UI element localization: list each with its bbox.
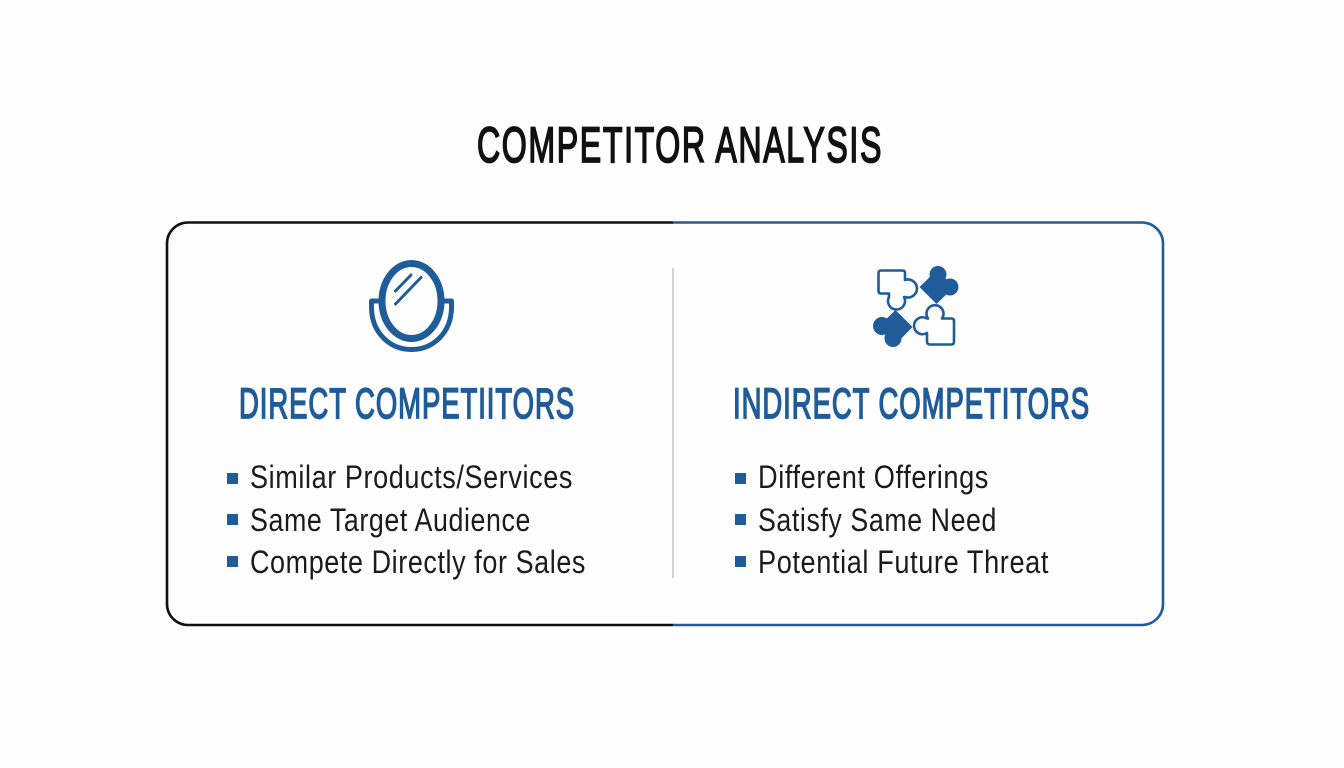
panel: indirect competitors [733, 266, 1090, 580]
list: direct competitor traits: Compete Directly for Sales [250, 544, 586, 580]
title: COMPETITOR ANALYSIS [477, 117, 883, 173]
list: direct competitor traits: Same Target Audience [250, 502, 531, 538]
panel: direct competitors [227, 264, 586, 580]
list: indirect competitor traits: Satisfy Same Need [758, 502, 997, 538]
list: indirect competitor traits: Different Offerings [758, 459, 989, 495]
list: indirect competitor traits: Potential Future Threat [758, 544, 1049, 580]
panel: comparison card [167, 222, 1163, 625]
heading: indirect competitors: INDIRECT COMPETITORS [733, 380, 1090, 428]
list: direct competitor traits [227, 459, 586, 580]
icon: mirror [372, 264, 452, 350]
icon: puzzle pieces [873, 266, 958, 347]
list: indirect competitor traits [735, 459, 1049, 580]
list: direct competitor traits: Similar Products/Services [250, 459, 573, 495]
heading: direct competitors: DIRECT COMPETIITORS [239, 380, 575, 428]
